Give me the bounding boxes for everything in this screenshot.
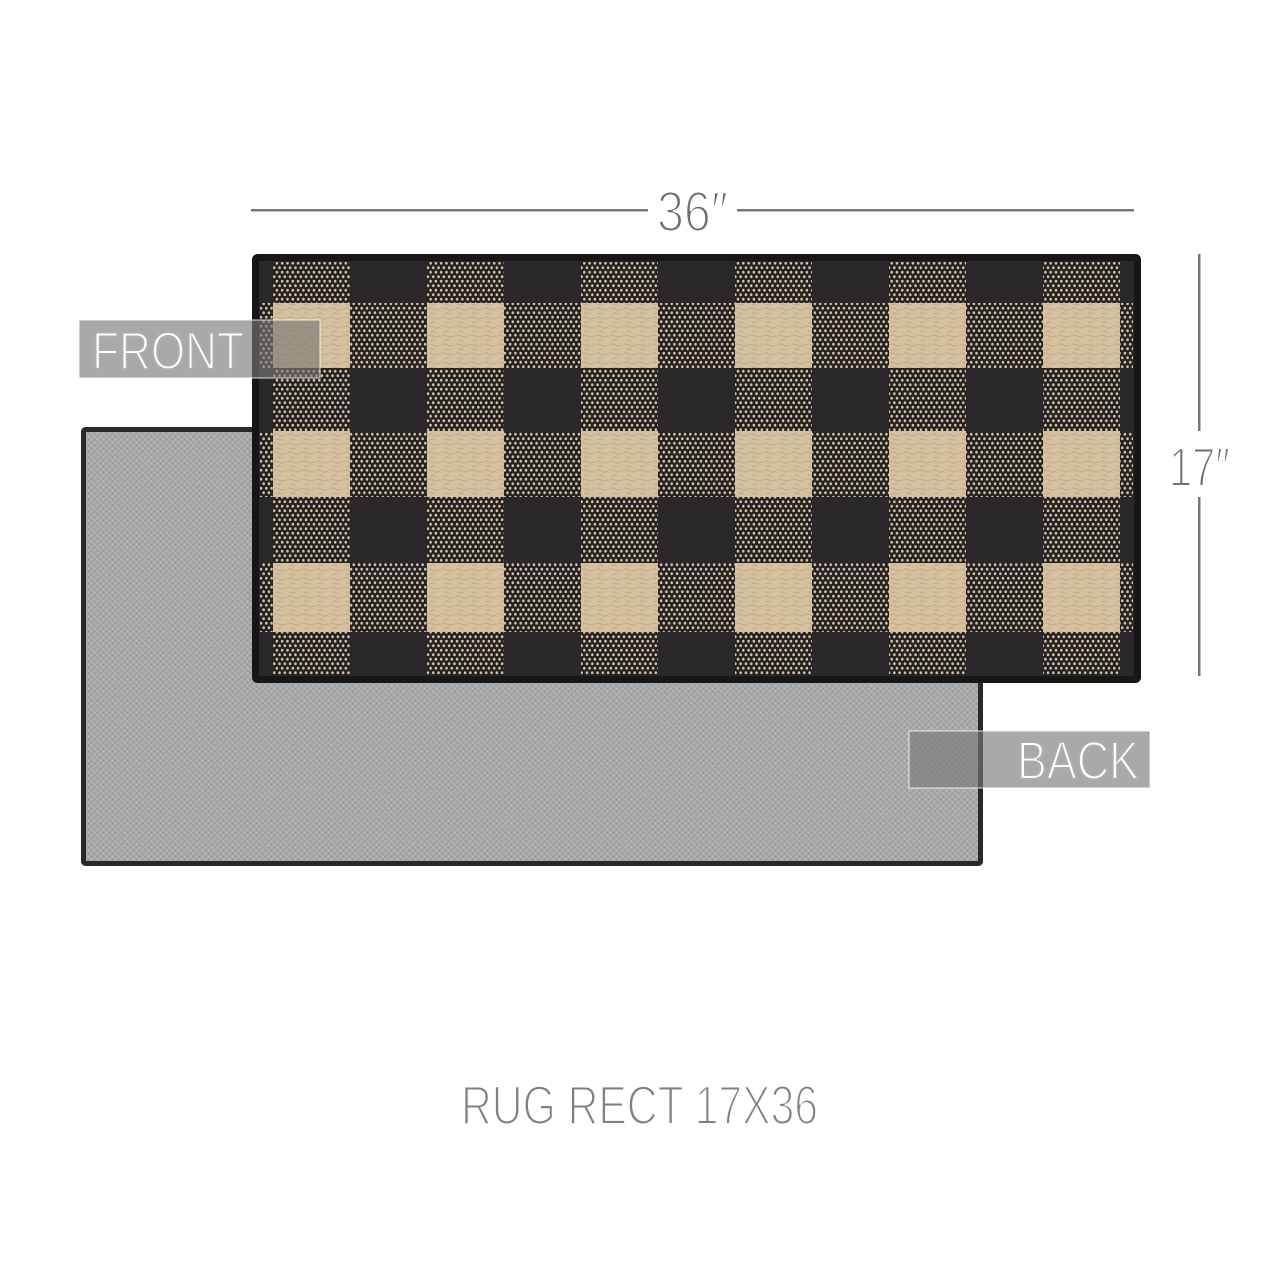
back of rug xyxy=(84,430,980,864)
label: back xyxy=(909,731,1150,791)
label: front: FRONT xyxy=(92,322,244,381)
product caption: RUG RECT 17X36 xyxy=(461,1074,818,1136)
width dimension: 36 inches: 36″ xyxy=(657,180,728,244)
height dimension: 17 inches: 17″ xyxy=(1169,436,1230,498)
front of rug: buffalo check xyxy=(196,258,1197,680)
label: back: BACK xyxy=(1017,731,1139,791)
